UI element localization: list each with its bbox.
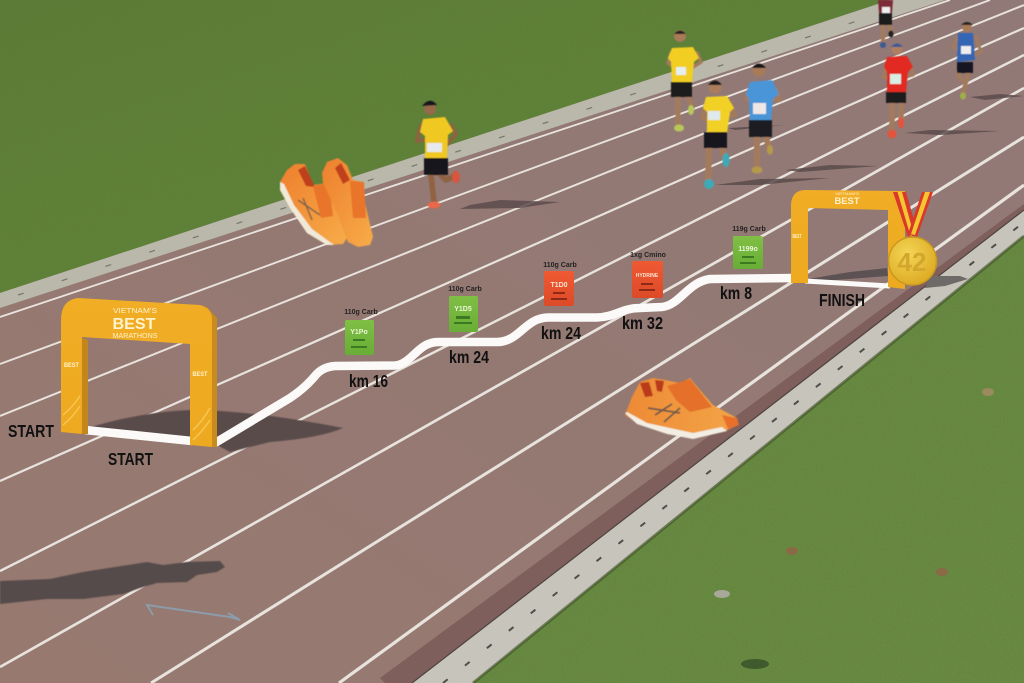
arch wave pattern bbox=[63, 396, 210, 440]
lower curb bbox=[412, 210, 1024, 683]
curb inner edge bbox=[412, 210, 1024, 683]
gel pack 4 bbox=[630, 252, 666, 298]
finish arch logo: BEST bbox=[834, 196, 860, 207]
arch logo: BEST bbox=[112, 316, 156, 333]
medal ribbon bbox=[893, 192, 918, 237]
label: start left: START bbox=[8, 421, 54, 441]
shoes: pair on track bbox=[280, 158, 373, 247]
track arrow marking bbox=[147, 605, 240, 620]
start arch bbox=[61, 298, 217, 447]
label: km 24 first: km 24 bbox=[449, 347, 489, 367]
label: km 8: km 8 bbox=[720, 283, 752, 303]
label: km 24 second: km 24 bbox=[541, 323, 581, 343]
upper-left grass field bbox=[0, 0, 890, 293]
gel pack 1: 110g Carb bbox=[344, 309, 378, 316]
curb markings bbox=[443, 222, 1024, 683]
finish medal bbox=[888, 192, 936, 285]
finish medal: 42 bbox=[898, 247, 926, 277]
finish arch logo: VIETNAM'S bbox=[835, 191, 859, 196]
label: finish: FINISH bbox=[819, 290, 865, 310]
gel pack 5 bbox=[732, 226, 766, 269]
gel pack 3: T1D0 bbox=[550, 282, 568, 289]
upper curb markings bbox=[18, 20, 860, 295]
label: km 16: km 16 bbox=[349, 371, 388, 391]
arch side faces bbox=[205, 305, 217, 447]
gel pack 2 bbox=[448, 286, 482, 332]
finish arch body bbox=[791, 190, 905, 289]
finish ground shadow bbox=[808, 268, 888, 282]
right shoe bbox=[322, 158, 373, 247]
arch logo bbox=[64, 306, 208, 378]
outer track band bbox=[380, 204, 1024, 683]
runner: yellow shirt far bbox=[668, 30, 701, 132]
arch logo: MARATHONS bbox=[112, 331, 158, 340]
runner: cap near shoes bbox=[417, 101, 460, 208]
upper curb bbox=[0, 0, 945, 308]
arch logo: VIETNAM'S bbox=[113, 306, 157, 315]
shoe: single on track bbox=[625, 378, 739, 439]
runner: blue tank bbox=[953, 22, 981, 100]
gel pack 3: 110g Carb bbox=[543, 262, 577, 269]
runner: yellow shirt front bbox=[702, 80, 735, 189]
gel pack 1 bbox=[344, 309, 378, 355]
runner: blue shirt bbox=[746, 64, 780, 174]
grass edge bbox=[473, 236, 1024, 683]
label: start lower: START bbox=[108, 449, 153, 469]
finish arch logo bbox=[792, 191, 860, 240]
finish arch bbox=[791, 190, 905, 289]
runner shadows bbox=[460, 94, 1024, 209]
ground shadow bottom left bbox=[0, 561, 225, 604]
runner: red shirt bbox=[883, 44, 913, 138]
grass debris bbox=[714, 388, 994, 669]
runner: top edge bbox=[878, 0, 894, 48]
finish arch logo: BEST bbox=[792, 234, 802, 240]
gel pack 5: 119g Carb bbox=[732, 226, 766, 233]
gel pack 4: 1xg Cmino bbox=[630, 252, 666, 259]
arch front bbox=[61, 298, 212, 447]
white route path bbox=[85, 278, 890, 443]
gel pack 3 bbox=[543, 262, 577, 306]
gel pack 1: Y1Po bbox=[350, 329, 368, 336]
gel pack 4: HYDRINE bbox=[636, 273, 659, 279]
upper grass texture bbox=[0, 0, 890, 293]
gel pack 2: 110g Carb bbox=[448, 286, 482, 293]
arch logo: BEST bbox=[192, 372, 208, 378]
labels bbox=[8, 283, 865, 469]
label: km 32: km 32 bbox=[622, 313, 663, 333]
medal ground shadow bbox=[925, 276, 968, 288]
left shoe bbox=[280, 164, 347, 245]
arch logo: BEST bbox=[64, 363, 79, 369]
lower grass texture bbox=[473, 236, 1024, 683]
gel pack 5: 1199o bbox=[738, 246, 758, 253]
gel pack 2: Y1D5 bbox=[454, 306, 472, 313]
start arch shadow bbox=[88, 410, 343, 452]
medal disc bbox=[888, 237, 936, 285]
lower-right grass field bbox=[473, 236, 1024, 683]
